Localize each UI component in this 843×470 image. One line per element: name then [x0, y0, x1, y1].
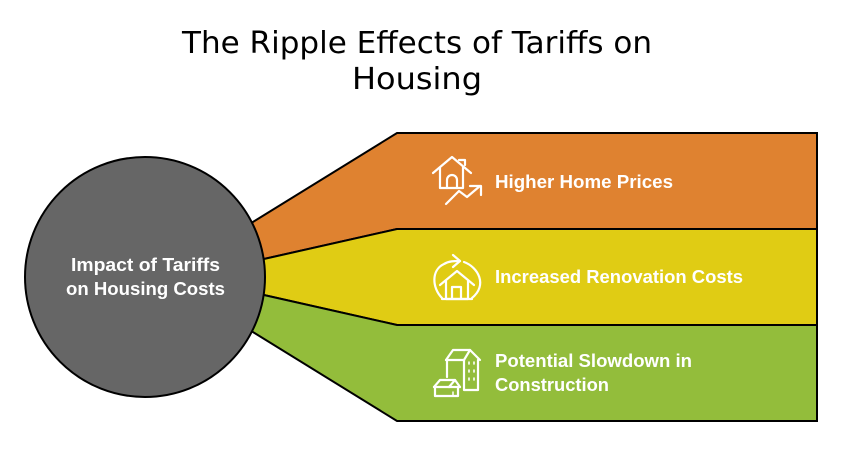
label: potential slowdown in construction: Construction	[495, 375, 609, 395]
panel: increased renovation costs	[255, 229, 817, 325]
icon: house with rising arrow	[433, 157, 481, 204]
label: increased renovation costs: Increased Renovation Costs	[495, 267, 743, 287]
title: The Ripple Effects of Tariffs on	[181, 26, 652, 61]
icon: house with circular arrow	[434, 255, 480, 299]
icon: buildings	[434, 350, 480, 396]
label: higher home prices: Higher Home Prices	[495, 172, 673, 192]
panel: higher home prices	[240, 133, 817, 261]
panel: potential slowdown in construction	[240, 293, 817, 421]
title	[181, 26, 652, 97]
label: impact of tariffs: Impact of Tariffs	[71, 255, 220, 275]
label: potential slowdown in construction: Potential Slowdown in	[495, 351, 692, 371]
title: Housing	[352, 62, 482, 97]
circle: impact of tariffs on housing costs: on Housing Costs	[66, 279, 225, 299]
circle: impact of tariffs on housing costs	[25, 157, 265, 397]
